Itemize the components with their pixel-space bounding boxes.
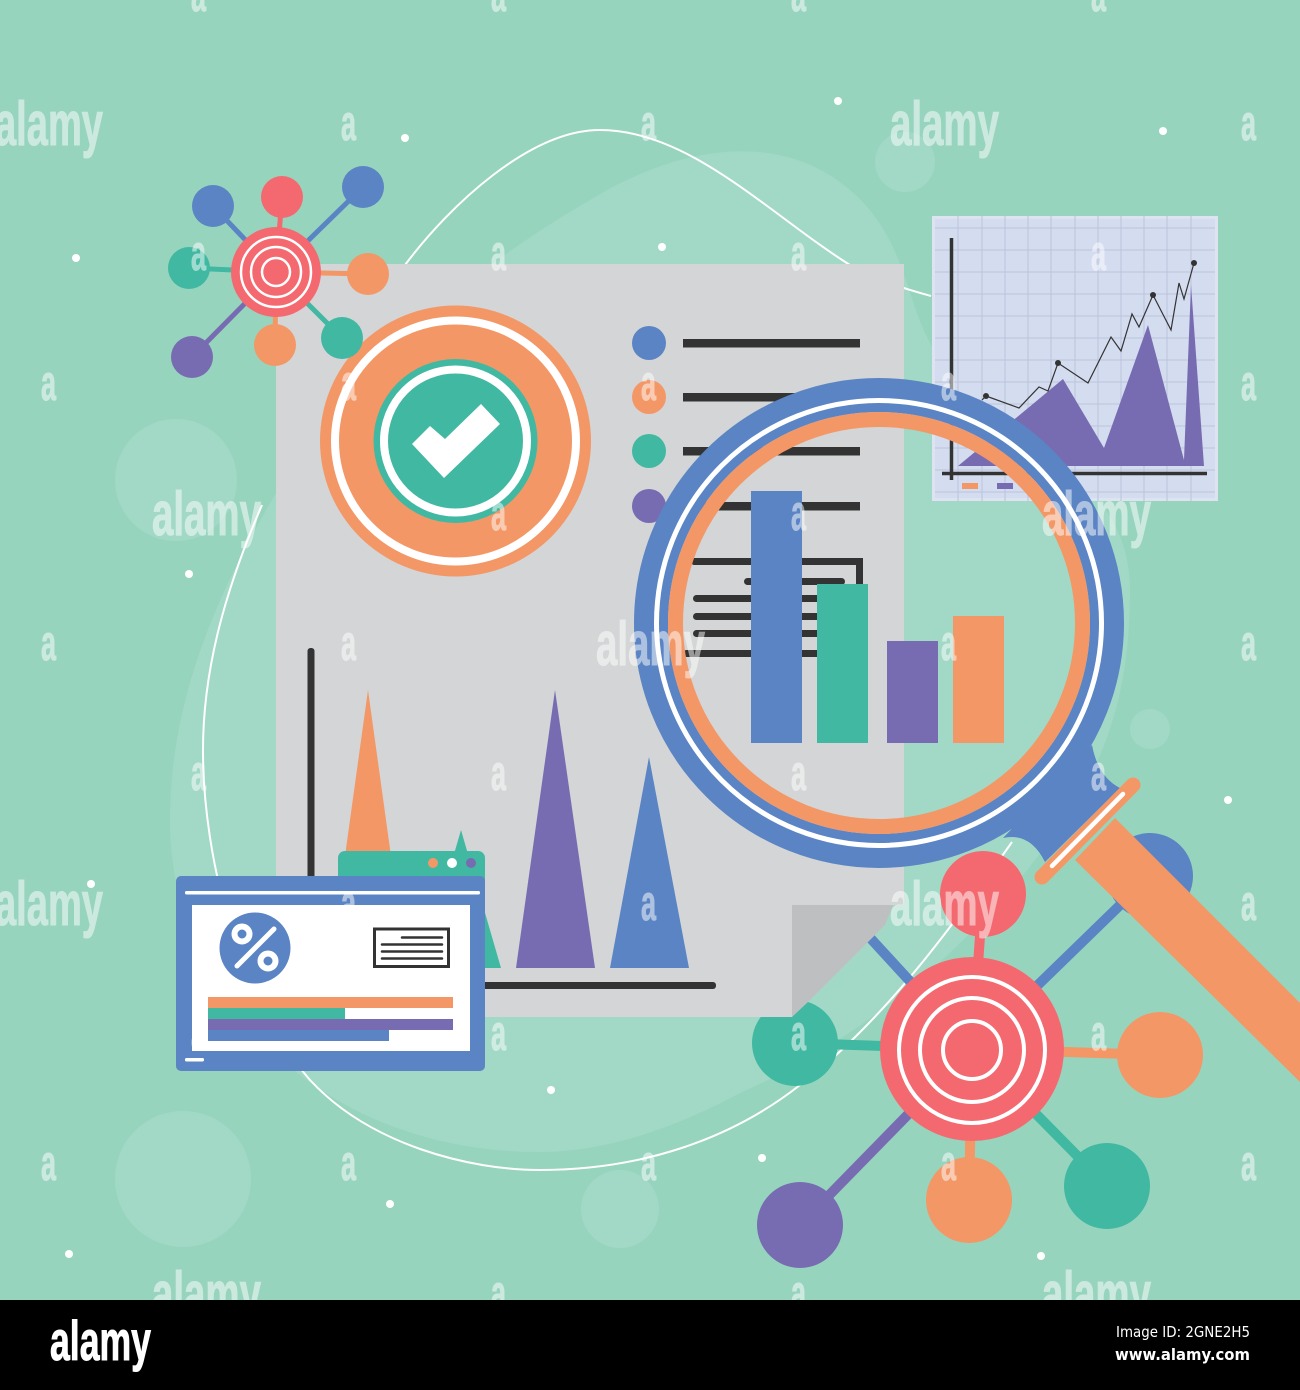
watermark: a — [1241, 355, 1257, 411]
watermark: a — [791, 485, 807, 541]
watermark: a — [1091, 225, 1107, 281]
watermark: alamy — [152, 480, 261, 549]
watermark: a — [641, 355, 657, 411]
watermark: a — [791, 225, 807, 281]
bullet list — [632, 326, 860, 523]
watermark: a — [41, 355, 57, 411]
window controls — [428, 858, 476, 868]
watermark: alamy — [0, 870, 103, 939]
magnified bar chart — [751, 491, 1004, 743]
watermark: alamy — [596, 610, 705, 679]
background blob — [170, 151, 1130, 1152]
watermark: a — [941, 615, 957, 671]
watermark: a — [341, 355, 357, 411]
watermark: a — [491, 745, 507, 801]
watermark: a — [491, 1265, 507, 1321]
lens rim — [651, 395, 1107, 851]
document page — [276, 264, 904, 1017]
back window tab — [338, 851, 485, 891]
triangle chart — [308, 648, 716, 989]
watermark: a — [1241, 95, 1257, 151]
watermark: alamy — [890, 90, 999, 159]
small target network — [168, 166, 389, 378]
sparkle dots — [65, 97, 1232, 1260]
folded corner — [792, 905, 893, 1017]
watermark: a — [491, 1005, 507, 1061]
text card under the lens — [683, 558, 863, 657]
watermark: a — [191, 225, 207, 281]
watermark: a — [341, 95, 357, 151]
watermark: a — [1241, 615, 1257, 671]
black line series — [982, 263, 1194, 408]
watermark: a — [941, 1135, 957, 1191]
purple area series — [958, 285, 1204, 466]
watermark: alamy — [1042, 1260, 1151, 1329]
watermark: a — [41, 615, 57, 671]
watermark: a — [1091, 745, 1107, 801]
footer logo: alamy — [50, 1309, 151, 1372]
handle neck — [1003, 745, 1120, 862]
window content — [192, 905, 470, 1051]
watermark: alamy — [0, 90, 103, 159]
watermark: a — [641, 1135, 657, 1191]
watermark: a — [791, 745, 807, 801]
line chart panel — [932, 216, 1218, 501]
watermark: a — [1091, 1005, 1107, 1061]
watermark: a — [641, 95, 657, 151]
magnifying glass — [651, 395, 1300, 1082]
watermark: a — [941, 355, 957, 411]
watermark: a — [641, 875, 657, 931]
white outline curve — [203, 130, 1012, 1170]
watermark: a — [341, 615, 357, 671]
page sheet — [276, 264, 904, 1017]
axes — [942, 238, 1207, 480]
watermark: a — [191, 1005, 207, 1061]
percent icon — [220, 912, 290, 984]
handle — [1075, 818, 1300, 1082]
watermark: a — [41, 1135, 57, 1191]
watermark: a — [341, 1135, 357, 1191]
watermark: a — [491, 485, 507, 541]
chart legend — [962, 483, 1013, 489]
watermark: a — [491, 225, 507, 281]
watermark: a — [1241, 875, 1257, 931]
large target network — [752, 833, 1203, 1268]
progress bars — [208, 997, 453, 1041]
image id: Image ID: 2GNE2H5 — [1116, 1323, 1250, 1341]
watermark: alamy — [152, 1260, 261, 1329]
check badge — [320, 306, 591, 576]
mini text card — [374, 929, 448, 966]
window frame — [176, 876, 485, 1071]
browser window card — [176, 851, 485, 1071]
handle collar — [1042, 785, 1133, 877]
watermark: a — [791, 1005, 807, 1061]
watermark: a — [1241, 1135, 1257, 1191]
website: www.alamy.com — [1115, 1345, 1250, 1364]
footer bar — [0, 1300, 1300, 1390]
watermark: alamy — [890, 870, 999, 939]
watermark: a — [191, 745, 207, 801]
watermark: a — [791, 1265, 807, 1321]
decorative pale circles — [115, 132, 1170, 1248]
watermark: alamy — [1042, 480, 1151, 549]
data points — [983, 260, 1197, 399]
watermark: a — [341, 875, 357, 931]
